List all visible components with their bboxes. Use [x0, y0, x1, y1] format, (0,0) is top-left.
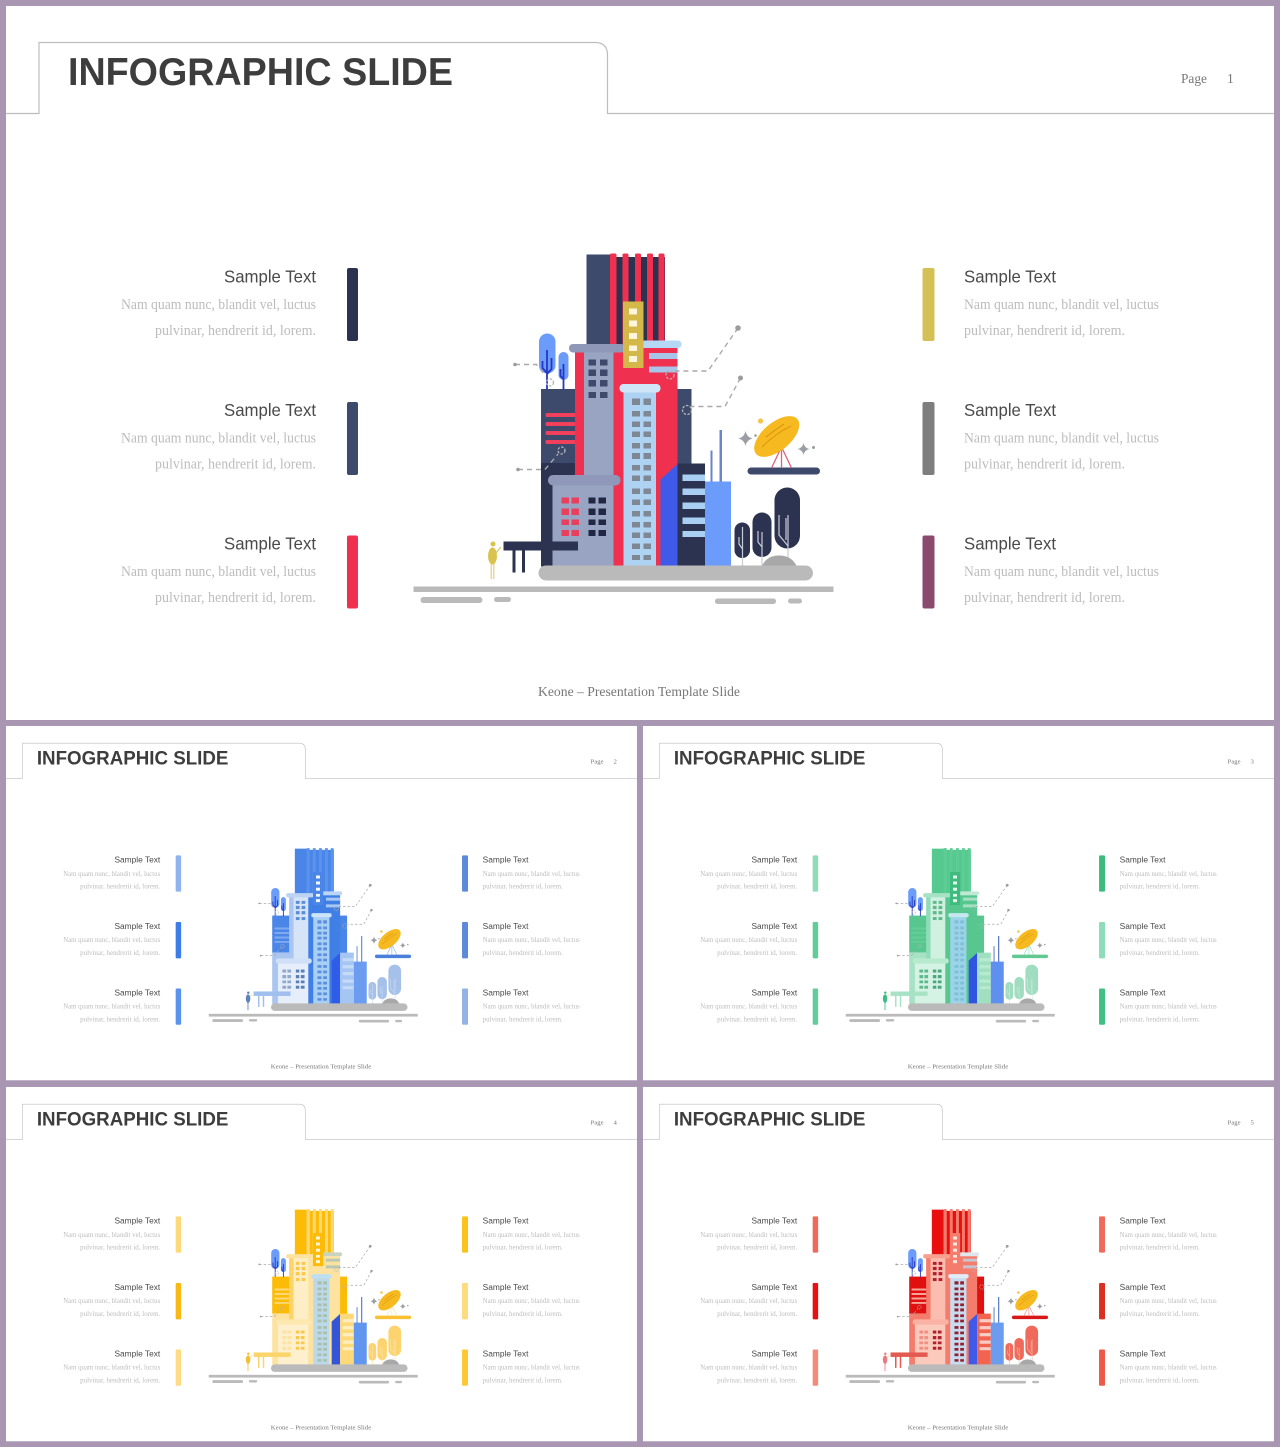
- text blocks: right: Nam quam nunc, blandit vel, luctus: [483, 1364, 580, 1372]
- colour bars: left: [176, 1216, 181, 1386]
- blue building with antennas: [705, 430, 731, 566]
- text blocks: left: pulvinar, hendrerit id, lorem.: [80, 1016, 160, 1024]
- text blocks: right: pulvinar, hendrerit id, lorem.: [1120, 1016, 1200, 1024]
- page number: Page: [591, 1119, 604, 1126]
- text blocks: left: Sample Text: [751, 1282, 798, 1292]
- panel: slide 3 green theme: [643, 726, 1274, 1080]
- text block: left 2: Nam quam nunc, blandit vel, luctus: [121, 430, 316, 446]
- blue wedge: [660, 464, 678, 566]
- title tab: [6, 42, 1274, 114]
- page number: Page: [1181, 71, 1207, 86]
- dock: [504, 542, 578, 572]
- text blocks: left: Nam quam nunc, blandit vel, luctus: [700, 1231, 797, 1239]
- text block: left 1: Nam quam nunc, blandit vel, luctus: [121, 297, 316, 313]
- yellow panel: [623, 302, 644, 368]
- text blocks: left: Sample Text: [751, 1216, 798, 1226]
- dark trees: [734, 488, 800, 567]
- upper column: [569, 344, 625, 476]
- text blocks: left: pulvinar, hendrerit id, lorem.: [717, 883, 797, 891]
- text blocks: left: Nam quam nunc, blandit vel, luctus: [63, 1003, 160, 1011]
- text blocks: left: Sample Text: [114, 1348, 161, 1358]
- text block: right 2: Nam quam nunc, blandit vel, luctus: [964, 430, 1159, 446]
- text blocks: left: [63, 855, 161, 1024]
- ground lines: [414, 586, 834, 604]
- text block: right 3: Sample Text: [964, 534, 1056, 554]
- text block: right 3: pulvinar, hendrerit id, lorem.: [964, 590, 1125, 606]
- title tab: [643, 743, 1274, 778]
- text blocks: right: pulvinar, hendrerit id, lorem.: [1120, 1244, 1200, 1252]
- text blocks: left: Sample Text: [114, 987, 161, 997]
- page number: 1: [1227, 71, 1234, 86]
- text blocks: left: Sample Text: [751, 921, 798, 931]
- page number: Page: [1228, 1119, 1241, 1126]
- text blocks: left: Nam quam nunc, blandit vel, luctus: [700, 870, 797, 878]
- satellite dish: [738, 408, 820, 474]
- colour bars: right: [1099, 855, 1105, 1025]
- footer: Keone – Presentation Template Slide: [271, 1424, 371, 1431]
- text blocks: right: Nam quam nunc, blandit vel, luctus: [1120, 1003, 1217, 1011]
- text blocks: right: pulvinar, hendrerit id, lorem.: [483, 1244, 563, 1252]
- text block: left 2: pulvinar, hendrerit id, lorem.: [155, 456, 316, 472]
- text blocks: right: pulvinar, hendrerit id, lorem.: [483, 1016, 563, 1024]
- text blocks: right: pulvinar, hendrerit id, lorem.: [483, 949, 563, 957]
- text blocks: left: Sample Text: [751, 987, 798, 997]
- text block: right 3: Nam quam nunc, blandit vel, luctus: [964, 564, 1159, 580]
- text blocks: right: pulvinar, hendrerit id, lorem.: [483, 1377, 563, 1385]
- page number: 4: [614, 1119, 618, 1126]
- text blocks: left: Nam quam nunc, blandit vel, luctus: [63, 1297, 160, 1305]
- right dark block: [677, 389, 692, 469]
- title: INFOGRAPHIC SLIDE: [674, 1108, 865, 1130]
- text blocks: right: Sample Text: [1120, 921, 1166, 931]
- text block: right 2: [964, 400, 1159, 472]
- text blocks: left: [700, 1216, 798, 1385]
- text blocks: left: pulvinar, hendrerit id, lorem.: [80, 883, 160, 891]
- dashed callout lines: [513, 325, 743, 471]
- text blocks: right: Nam quam nunc, blandit vel, luctus: [1120, 1297, 1217, 1305]
- text blocks: right: Nam quam nunc, blandit vel, luctus: [483, 870, 580, 878]
- building illustration: [846, 1209, 1055, 1384]
- text blocks: left: Sample Text: [114, 921, 161, 931]
- light tower: [620, 384, 660, 566]
- title: INFOGRAPHIC SLIDE: [37, 1108, 228, 1130]
- text blocks: left: Sample Text: [751, 855, 798, 865]
- page number: [1181, 71, 1234, 86]
- text blocks: left: pulvinar, hendrerit id, lorem.: [717, 1244, 797, 1252]
- text blocks: left: pulvinar, hendrerit id, lorem.: [717, 1016, 797, 1024]
- text blocks: left: Nam quam nunc, blandit vel, luctus: [63, 1364, 160, 1372]
- text block: left 3: Sample Text: [224, 534, 316, 554]
- text blocks: right: Sample Text: [483, 987, 529, 997]
- text blocks: right: Nam quam nunc, blandit vel, luctus: [1120, 1231, 1217, 1239]
- text blocks: right: pulvinar, hendrerit id, lorem.: [483, 883, 563, 891]
- text blocks: left: [700, 855, 798, 1024]
- text blocks: right: pulvinar, hendrerit id, lorem.: [1120, 883, 1200, 891]
- page number: 2: [614, 758, 617, 765]
- text blocks: right: Nam quam nunc, blandit vel, luctus: [1120, 870, 1217, 878]
- text block: right 2: pulvinar, hendrerit id, lorem.: [964, 456, 1125, 472]
- text blocks: right: Nam quam nunc, blandit vel, luctus: [483, 936, 580, 944]
- text block: left 1: Sample Text: [224, 266, 316, 286]
- title: INFOGRAPHIC SLIDE: [68, 51, 453, 94]
- building illustration: [209, 848, 418, 1023]
- building illustration: [846, 848, 1055, 1023]
- text blocks: right: [483, 855, 580, 1024]
- text blocks: right: Sample Text: [483, 1348, 529, 1358]
- panel: slide 4 yellow theme: [6, 1087, 637, 1441]
- title tab: [643, 1104, 1274, 1139]
- text blocks: right: pulvinar, hendrerit id, lorem.: [1120, 1377, 1200, 1385]
- footer: Keone – Presentation Template Slide: [908, 1424, 1008, 1431]
- text blocks: right: Sample Text: [1120, 1216, 1166, 1226]
- text blocks: right: Sample Text: [1120, 987, 1166, 997]
- text block: right 1: pulvinar, hendrerit id, lorem.: [964, 323, 1125, 339]
- text blocks: left: Nam quam nunc, blandit vel, luctus: [63, 870, 160, 878]
- text blocks: right: Sample Text: [483, 855, 529, 865]
- text blocks: right: Nam quam nunc, blandit vel, luctus: [483, 1297, 580, 1305]
- footer: Keone – Presentation Template Slide: [538, 684, 740, 699]
- colour bars: left: [347, 268, 358, 608]
- colour bars: left: [813, 855, 818, 1025]
- panel: slide 5 red theme: [643, 1087, 1274, 1441]
- text blocks: right: pulvinar, hendrerit id, lorem.: [483, 1310, 563, 1318]
- text blocks: left: pulvinar, hendrerit id, lorem.: [80, 1244, 160, 1252]
- page number: [1228, 1119, 1255, 1126]
- top tower: [586, 254, 665, 347]
- page number: Page: [1228, 758, 1241, 765]
- colour bars: right: [462, 855, 468, 1025]
- text blocks: right: Sample Text: [483, 921, 529, 931]
- text blocks: left: pulvinar, hendrerit id, lorem.: [80, 1310, 160, 1318]
- text block: left 3: pulvinar, hendrerit id, lorem.: [155, 590, 316, 606]
- text blocks: left: pulvinar, hendrerit id, lorem.: [717, 1377, 797, 1385]
- page number: 5: [1251, 1119, 1255, 1126]
- text blocks: left: Nam quam nunc, blandit vel, luctus: [700, 1297, 797, 1305]
- text block: right 2: Sample Text: [964, 400, 1056, 420]
- text blocks: right: [483, 1216, 580, 1385]
- text block: right 1: [964, 266, 1159, 339]
- text blocks: left: pulvinar, hendrerit id, lorem.: [717, 949, 797, 957]
- title tab: [6, 743, 637, 778]
- text blocks: left: Sample Text: [114, 1282, 161, 1292]
- page number: [591, 758, 617, 765]
- text block: right 1: Nam quam nunc, blandit vel, luctus: [964, 297, 1159, 313]
- text blocks: right: [1120, 855, 1217, 1024]
- text block: left 1: [121, 266, 316, 339]
- panel: slide 2 blue theme: [6, 726, 637, 1080]
- building illustration: [209, 1209, 418, 1384]
- title: INFOGRAPHIC SLIDE: [37, 747, 228, 769]
- text blocks: left: Nam quam nunc, blandit vel, luctus: [700, 936, 797, 944]
- text block: right 3: [964, 534, 1159, 606]
- text blocks: right: Nam quam nunc, blandit vel, luctus: [1120, 1364, 1217, 1372]
- text blocks: left: Sample Text: [114, 1216, 161, 1226]
- text block: left 3: [121, 534, 316, 606]
- text blocks: left: Sample Text: [751, 1348, 798, 1358]
- text blocks: left: pulvinar, hendrerit id, lorem.: [80, 949, 160, 957]
- ground slab: [538, 566, 813, 580]
- text blocks: right: [1120, 1216, 1217, 1385]
- colour bars: right: [462, 1216, 468, 1386]
- text blocks: right: Sample Text: [1120, 855, 1166, 865]
- footer: Keone – Presentation Template Slide: [908, 1063, 1008, 1070]
- text blocks: right: Nam quam nunc, blandit vel, luctus: [1120, 936, 1217, 944]
- blue trees: [539, 334, 568, 390]
- colour bars: right: [1099, 1216, 1105, 1386]
- page number: Page: [591, 758, 604, 765]
- text blocks: right: pulvinar, hendrerit id, lorem.: [1120, 1310, 1200, 1318]
- left block: [541, 389, 576, 566]
- lower block: [548, 475, 620, 566]
- text blocks: right: Sample Text: [1120, 1282, 1166, 1292]
- text blocks: left: [63, 1216, 161, 1385]
- title tab: [6, 1104, 637, 1139]
- page number: [1228, 758, 1255, 765]
- text blocks: left: pulvinar, hendrerit id, lorem.: [80, 1377, 160, 1385]
- title: INFOGRAPHIC SLIDE: [674, 747, 865, 769]
- text block: right 1: Sample Text: [964, 266, 1056, 286]
- text block: left 2: [121, 400, 316, 472]
- panel: main slide: [6, 6, 1274, 720]
- colour bars: left: [176, 855, 181, 1025]
- text blocks: left: Nam quam nunc, blandit vel, luctus: [700, 1364, 797, 1372]
- person: [488, 542, 501, 579]
- colour bars: right: [922, 268, 934, 608]
- text blocks: left: pulvinar, hendrerit id, lorem.: [717, 1310, 797, 1318]
- building illustration: [414, 254, 834, 604]
- page number: 3: [1251, 758, 1255, 765]
- text blocks: right: Sample Text: [483, 1216, 529, 1226]
- footer: Keone – Presentation Template Slide: [271, 1063, 371, 1070]
- text block: left 3: Nam quam nunc, blandit vel, luctus: [121, 564, 316, 580]
- page number: [591, 1119, 618, 1126]
- striped building: [678, 464, 705, 566]
- text blocks: right: Nam quam nunc, blandit vel, luctus: [483, 1003, 580, 1011]
- text blocks: left: Nam quam nunc, blandit vel, luctus: [700, 1003, 797, 1011]
- text block: left 2: Sample Text: [224, 400, 316, 420]
- text block: left 1: pulvinar, hendrerit id, lorem.: [155, 323, 316, 339]
- text blocks: right: Sample Text: [1120, 1348, 1166, 1358]
- text blocks: right: Sample Text: [483, 1282, 529, 1292]
- text blocks: right: pulvinar, hendrerit id, lorem.: [1120, 949, 1200, 957]
- red main block: [613, 340, 682, 566]
- text blocks: right: Nam quam nunc, blandit vel, luctus: [483, 1231, 580, 1239]
- text blocks: left: Sample Text: [114, 855, 161, 865]
- ground mound: [762, 555, 797, 567]
- text blocks: left: Nam quam nunc, blandit vel, luctus: [63, 1231, 160, 1239]
- colour bars: left: [813, 1216, 818, 1386]
- text blocks: left: Nam quam nunc, blandit vel, luctus: [63, 936, 160, 944]
